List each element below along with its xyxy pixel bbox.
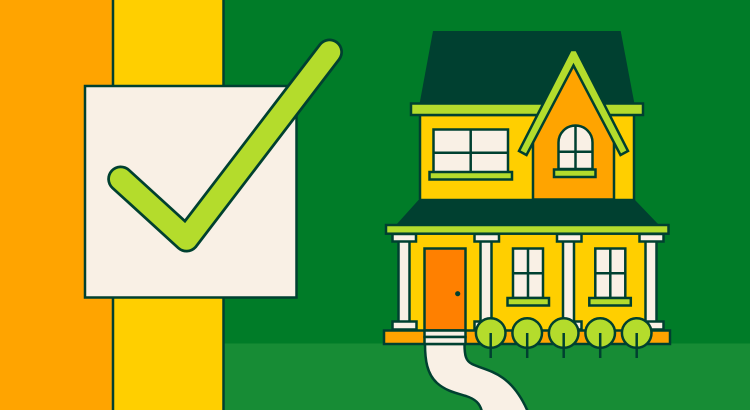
upper roof xyxy=(420,31,634,104)
upper left window sill xyxy=(430,172,512,180)
lower window 1 sill xyxy=(508,298,549,306)
bush 1 xyxy=(476,318,506,358)
gable window sill xyxy=(554,170,596,177)
gable trim xyxy=(519,50,628,155)
upper left window xyxy=(434,130,508,172)
stripe: orange xyxy=(0,0,113,410)
walkway xyxy=(425,344,528,410)
foundation xyxy=(384,330,670,344)
column 2 xyxy=(474,234,499,330)
door knob xyxy=(455,291,460,296)
arched gable window xyxy=(558,126,592,169)
lower window 1 xyxy=(513,248,543,298)
column 3 xyxy=(557,234,582,330)
porch roof xyxy=(396,200,659,225)
grass xyxy=(224,344,750,410)
lower window 2 sill xyxy=(589,298,631,306)
bush 3 xyxy=(549,318,578,358)
column 4 xyxy=(640,234,664,330)
door xyxy=(424,248,466,330)
gable front xyxy=(533,62,614,200)
icon: check mark xyxy=(121,52,330,239)
lower wall xyxy=(408,234,646,331)
house xyxy=(384,31,670,410)
front steps xyxy=(424,330,466,344)
checkbox xyxy=(85,86,296,298)
upper wall xyxy=(420,115,634,200)
bush 5 xyxy=(622,318,652,358)
bush 4 xyxy=(585,318,615,358)
porch eave xyxy=(386,225,668,234)
bush 2 xyxy=(512,318,542,358)
lower window 2 xyxy=(595,248,625,298)
upper eave xyxy=(411,104,643,115)
column 1 xyxy=(392,234,416,330)
stripe: yellow xyxy=(113,0,224,410)
